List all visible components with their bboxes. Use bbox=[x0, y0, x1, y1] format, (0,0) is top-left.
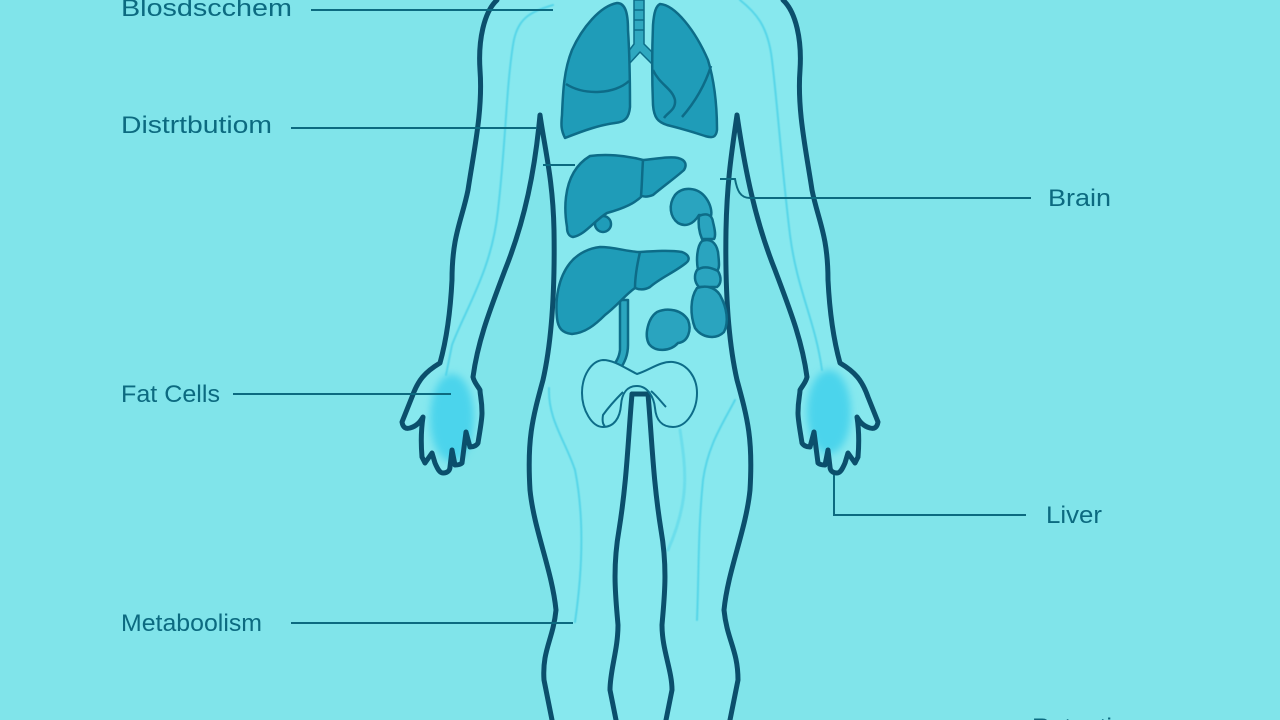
organ: intestine bbox=[671, 189, 727, 337]
label: Fat Cells: Fat Cells bbox=[121, 381, 220, 408]
organ: stomach bbox=[647, 310, 690, 350]
label: Liver: Liver bbox=[1046, 502, 1102, 529]
icon: right hand glow bbox=[807, 370, 851, 454]
right lung bbox=[652, 4, 717, 137]
icon: left hand glow bbox=[430, 374, 474, 462]
organ: pelvis bbox=[582, 360, 697, 427]
label: Brain: Brain bbox=[1048, 185, 1111, 212]
label: Metaboolism: Metaboolism bbox=[121, 610, 262, 637]
organ: upper liver bbox=[565, 155, 686, 237]
organ: lower liver bbox=[556, 247, 689, 371]
label: Distrtbutiom: Distrtbutiom bbox=[121, 112, 272, 139]
trachea bbox=[628, 0, 652, 64]
callout lines bbox=[233, 10, 1031, 623]
left lung bbox=[561, 3, 630, 138]
veins bbox=[446, 0, 822, 622]
body silhouette fill bbox=[402, 0, 878, 720]
organ: lungs bbox=[561, 0, 717, 138]
body outline bbox=[402, 0, 878, 720]
